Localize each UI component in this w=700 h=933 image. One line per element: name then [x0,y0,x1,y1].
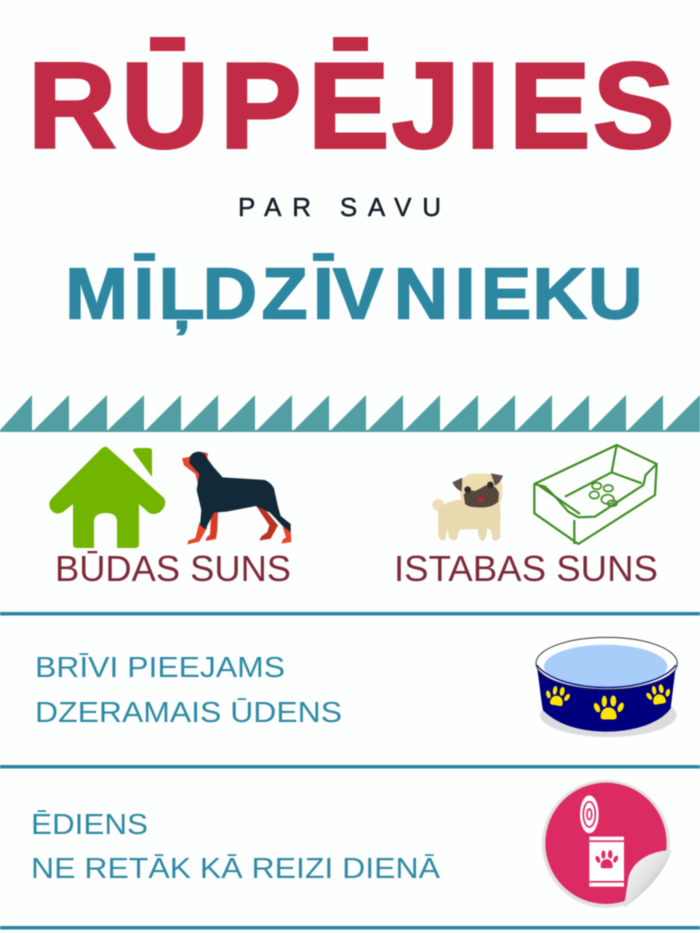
subtitle: par savu: PAR SAVU [238,192,441,222]
panel: dog types [49,445,658,589]
label: būdas suns: BŪDAS SUNS [55,548,291,589]
text: drinking water: BRĪVI PIEEJAMS [35,652,285,684]
panel: food [31,780,677,913]
label: istabas suns: ISTABAS SUNS [394,548,658,589]
icon: dog bed [534,445,657,544]
icon: water bowl [536,637,677,737]
text: feeding: NE RETĀK KĀ REIZI DIENĀ [31,853,441,885]
title: mīļdzīvnieku: MĪĻDZĪVNIEKU [65,253,643,335]
text: feeding: ĒDIENS [31,809,148,841]
icon: rottweiler [182,452,291,544]
text: drinking water: DZERAMAIS ŪDENS [35,697,342,729]
icon: pet food sticker [542,780,677,913]
icon: pug [432,473,503,541]
triangle band [0,395,700,432]
icon: green doghouse [49,447,165,548]
title: Rūpējies: RŪPĒJIES [28,38,674,174]
panel: water [35,637,677,737]
